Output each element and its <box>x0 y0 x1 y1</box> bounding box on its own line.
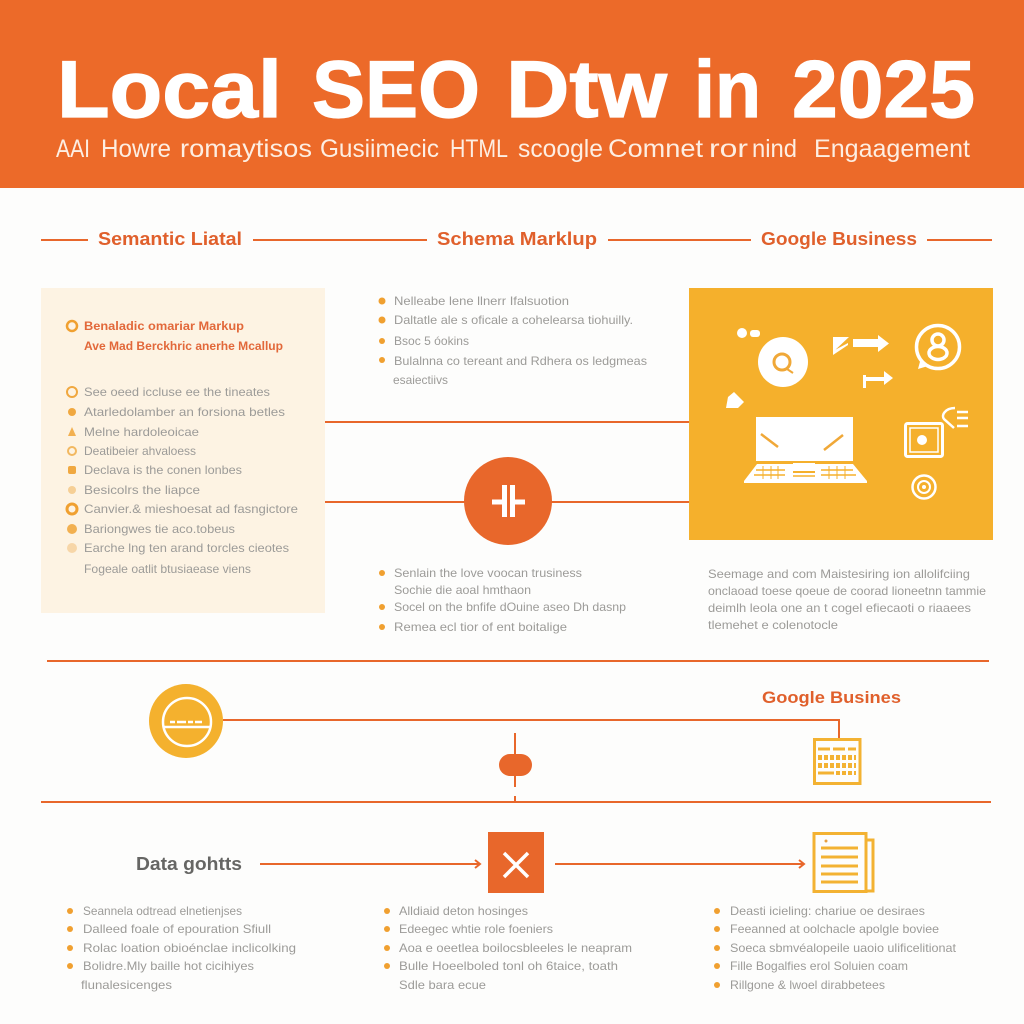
list: right column: Soeca sbmvéalopeile uaoio ulificelitionat <box>730 941 957 955</box>
icon: document <box>814 834 873 892</box>
title <box>57 45 975 135</box>
google business paragraph: onclaoad toese qoeue de coorad lioneetnn tammie <box>708 584 986 598</box>
list: left column: Rolac loation obioénclae inclicolking <box>83 941 296 955</box>
panel list text: Deatibeier ahvaloess <box>84 444 196 458</box>
subtitle: HTML <box>450 135 508 163</box>
title: SEO <box>312 45 480 135</box>
subtitle: AAI <box>56 135 90 163</box>
google business paragraph <box>708 567 986 632</box>
title: in <box>694 45 761 135</box>
google business paragraph: tlemehet e colenotocle <box>708 618 838 632</box>
subtitle: Comnet <box>608 135 703 163</box>
header banner <box>0 0 1024 188</box>
icon: orange x box <box>488 832 544 893</box>
icon: yellow circle <box>149 684 223 758</box>
arrow <box>863 371 893 388</box>
icon: calendar <box>814 740 860 784</box>
panel list text: Besicolrs the liapce <box>84 483 200 497</box>
center list top: Bulalnna co tereant and Rdhera os ledgmeas <box>394 354 647 368</box>
list: center column: Aoa e oeetlea boilocsbleeles le neapram <box>399 941 632 955</box>
list: center column: Alldiaid deton hosinges <box>399 904 528 918</box>
arrow <box>853 335 889 352</box>
list: left column <box>67 904 296 992</box>
panel: semantic list <box>41 288 325 613</box>
list: right column: Fille Bogalfies erol Soluien coam <box>730 959 908 973</box>
icon: small triangle <box>726 392 744 408</box>
icon: laptop <box>744 417 867 483</box>
google business paragraph: Seemage and com Maistesiring ion allolifciing <box>708 567 970 581</box>
icon: dots <box>737 328 760 338</box>
subtitle: scoogle <box>518 135 603 163</box>
label: google business: Google Busines <box>762 688 901 707</box>
pill node <box>499 733 532 802</box>
google business paragraph: deimlh leola one an t cogel efiecaoti o riaaees <box>708 601 971 615</box>
center list top <box>378 294 647 387</box>
panel heading text: Ave Mad Berckhric anerhe Mcallup <box>84 339 283 353</box>
list: right column: Rillgone & lwoel dirabbetees <box>730 978 885 992</box>
panel list text: See oeed iccluse ee the tineates <box>84 385 270 399</box>
panel list text: Fogeale oatlit btusiaease viens <box>84 562 251 576</box>
list: center column: Sdle bara ecue <box>399 978 486 992</box>
panel list text: Melne hardoleoicae <box>84 425 199 439</box>
list: center column: Edeegec whtie role foeniers <box>399 922 553 936</box>
panel heading text: Benaladic omariar Markup <box>84 319 244 333</box>
arrow <box>555 860 804 868</box>
list: right column: Feeanned at oolchacle apolgle boviee <box>730 922 939 936</box>
center list top: Bsoc 5 óokins <box>394 334 469 348</box>
icon: flag <box>833 337 849 355</box>
subtitle <box>56 135 970 163</box>
list: left column: Bolidre.Mly baille hot cicihiyes <box>83 959 254 973</box>
panel heading bullet <box>67 321 77 331</box>
subtitle: Gusiimecic <box>320 135 439 163</box>
center list bottom: Socel on the bnfife dOuine aseo Dh dasnp <box>394 600 626 614</box>
subtitle: Engaagement <box>814 135 970 163</box>
panel list text <box>84 385 298 576</box>
center list top: Nelleabe lene llnerr Ifalsuotion <box>394 294 569 308</box>
subtitle: Howre <box>101 135 171 163</box>
center list bottom: Remea ecl tior of ent boitalige <box>394 620 567 634</box>
heading: google: Google Business <box>761 229 917 249</box>
panel list text: Canvier.& mieshoesat ad fasngictore <box>84 502 298 516</box>
heading: semantic: Semantic Liatal <box>98 229 242 249</box>
panel heading text <box>84 319 283 353</box>
connector lines <box>325 422 689 502</box>
center list bottom: Sochie die aoal hmthaon <box>394 583 531 597</box>
list: left column: Seannela odtread elnetienjses <box>83 904 242 918</box>
title: Dtw <box>506 45 668 135</box>
center list top: esaiectiivs <box>393 373 448 387</box>
arrow <box>260 860 480 868</box>
list: left column: flunalesicenges <box>81 978 172 992</box>
icon: target <box>912 476 936 498</box>
panel list text: Bariongwes tie aco.tobeus <box>84 522 235 536</box>
center list bottom <box>379 566 626 634</box>
icon: search circle <box>758 337 808 387</box>
center circle icon <box>464 457 552 545</box>
panel: google business illustration <box>689 288 993 540</box>
panel list text: Earche lng ten arand torcles cieotes <box>84 541 289 555</box>
panel bullet icons <box>67 387 77 553</box>
title: Local <box>57 45 282 135</box>
icon: chat badge <box>916 326 960 369</box>
subtitle: nind <box>752 135 797 163</box>
center list bottom: Senlain the love voocan trusiness <box>394 566 582 580</box>
icon: device <box>906 408 968 456</box>
subtitle: romaytisos <box>180 135 312 163</box>
section heading row <box>41 229 992 249</box>
title: 2025 <box>792 45 975 135</box>
lower flow rules <box>41 661 991 802</box>
panel list text: Declava is the conen lonbes <box>84 463 242 477</box>
panel list text: Atarledolamber an forsiona betles <box>84 405 285 419</box>
center list top: Daltatle ale s oficale a cohelearsa tiohuilly. <box>394 313 633 327</box>
list: center column <box>384 904 632 992</box>
connector to calendar <box>223 720 839 738</box>
subtitle: ror <box>709 135 748 163</box>
list: left column: Dalleed foale of epouration Sfiull <box>83 922 271 936</box>
list: center column: Bulle Hoeelboled tonl oh 6taice, toath <box>399 959 618 973</box>
list: right column: Deasti icieling: chariue oe desiraes <box>730 904 925 918</box>
list: right column <box>714 904 957 992</box>
heading: schema: Schema Marklup <box>437 229 597 249</box>
label: data: Data gohtts <box>136 854 242 874</box>
